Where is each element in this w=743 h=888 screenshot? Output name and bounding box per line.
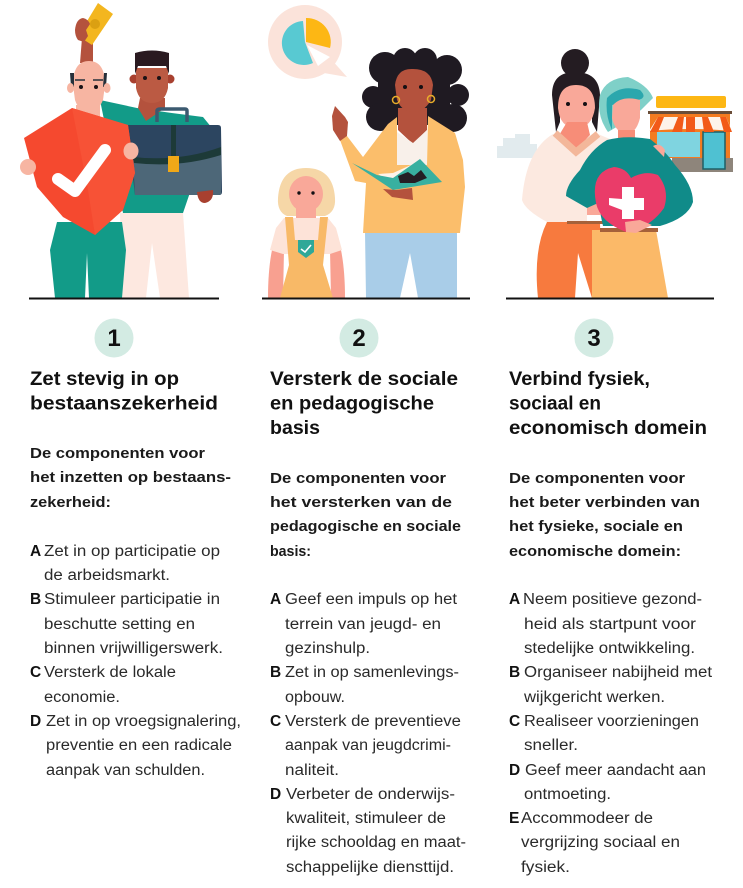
woman with hair bun	[522, 49, 625, 298]
column 3 heading: sociaal en	[509, 392, 601, 414]
number badge 1: 1	[107, 325, 121, 352]
column 3 list: Neem positieve gezond-	[523, 591, 702, 608]
column 3 intro: economische domein:	[509, 543, 681, 560]
number badge 2: 2	[352, 325, 366, 352]
column 3 list: fysiek.	[521, 859, 570, 876]
column 3 intro: het beter verbinden van	[509, 494, 700, 511]
column 1 intro: zekerheid:	[30, 494, 111, 511]
column 2 list: terrein van jeugd- en	[285, 616, 441, 633]
column 1 list: Versterk de lokale	[44, 664, 176, 681]
column 1 list: A	[30, 543, 41, 560]
column 1 list: beschutte setting en	[44, 616, 195, 633]
column 3 list: B	[509, 664, 520, 681]
open book	[352, 159, 442, 200]
column 3 list: E	[509, 810, 519, 827]
column 2 heading: Versterk de sociale	[270, 368, 458, 390]
column 2 list: C	[270, 713, 281, 730]
icon: red shield with check mark	[20, 108, 138, 235]
column 3 list: D	[509, 762, 520, 779]
column 3 list: ontmoeting.	[524, 786, 611, 803]
column 3 list: Organiseer nabijheid met	[524, 664, 713, 681]
column 3 intro	[509, 470, 700, 560]
column 3 list: Geef meer aandacht aan	[525, 762, 706, 779]
column 2 list: rijke schooldag en maat-	[286, 834, 466, 851]
column 2 intro: het versterken van de	[270, 494, 452, 511]
column 3 heading	[509, 368, 707, 439]
number badge 1	[94, 318, 134, 358]
number badge 2	[340, 318, 378, 358]
column 2 intro: De componenten voor	[270, 470, 446, 487]
column 1 list: Zet in op vroegsignalering,	[46, 713, 241, 730]
column 1 list: preventie en een radicale	[46, 737, 232, 754]
column 1 list: Zet in op participatie op	[44, 543, 220, 560]
column 1 list: aanpak van schulden.	[46, 762, 205, 779]
shop building	[648, 96, 733, 172]
column 2 list	[270, 591, 466, 876]
column 3 intro: het fysieke, sociale en	[509, 518, 683, 535]
column 1 intro: De componenten voor	[30, 445, 205, 462]
column 1 heading: Zet stevig in op	[30, 368, 179, 390]
column 1 list: economie.	[44, 689, 120, 706]
column 1 heading	[30, 368, 218, 414]
column 2 intro	[270, 470, 461, 560]
column 2 heading: basis	[270, 417, 320, 439]
column 2 list: gezinshulp.	[285, 640, 370, 657]
column 2 list: B	[270, 664, 281, 681]
column 2 intro: pedagogische en sociale	[270, 518, 461, 535]
column 2 list: kwaliteit, stimuleer de	[286, 810, 446, 827]
column 3 list: heid als startpunt voor	[524, 616, 696, 633]
illustration: woman pointing at pie chart, with girl	[268, 5, 469, 298]
column 3 list: A	[509, 591, 520, 608]
column 2 list: A	[270, 591, 281, 608]
column 3 list: Accommodeer de	[521, 810, 653, 827]
column 1 list: Stimuleer participatie in	[44, 591, 220, 608]
man with shield	[50, 38, 126, 298]
column 2 list: Verbeter de onderwijs-	[286, 786, 455, 803]
column 1 list: de arbeidsmarkt.	[44, 567, 170, 584]
column 3 list: vergrijzing sociaal en	[521, 834, 680, 851]
column 1 list: D	[30, 713, 41, 730]
column 3 list: stedelijke ontwikkeling.	[524, 640, 695, 657]
column 3 list: C	[509, 713, 520, 730]
column 3 list	[509, 591, 713, 876]
icon: banknote	[75, 3, 113, 45]
column 2 list: D	[270, 786, 281, 803]
column 1 intro: het inzetten op bestaans-	[30, 469, 231, 486]
column 1 intro	[30, 445, 231, 511]
girl in overalls	[268, 168, 345, 298]
column 3 list: Realiseer voorzieningen	[524, 713, 699, 730]
icon: briefcase	[127, 109, 222, 203]
column 3 heading: economisch domein	[509, 417, 707, 439]
column 2 list: Zet in op samenlevings-	[285, 664, 459, 681]
column 2 list: Versterk de preventieve	[285, 713, 461, 730]
column 2 heading	[270, 368, 458, 439]
column 1 list: binnen vrijwilligerswerk.	[44, 640, 223, 657]
column 2 list: schappelijke diensttijd.	[286, 859, 454, 876]
column 1 list: B	[30, 591, 41, 608]
column 2 list: Geef een impuls op het	[285, 591, 458, 608]
speech bubble with pie chart	[268, 5, 347, 79]
column 1 list	[30, 543, 241, 779]
column 2 list: aanpak van jeugdcrimi-	[285, 737, 451, 754]
column 3 intro: De componenten voor	[509, 470, 685, 487]
column 1 heading: bestaanszekerheid	[30, 392, 218, 414]
column 2 heading: en pedagogische	[270, 392, 434, 414]
number badge 3	[574, 318, 614, 358]
column 1 list: C	[30, 664, 41, 681]
illustration: two men with shield and briefcase	[20, 3, 222, 298]
man with briefcase	[100, 50, 212, 298]
column 3 heading: Verbind fysiek,	[509, 368, 650, 390]
baseline rules	[29, 298, 714, 300]
number badge 3: 3	[587, 325, 601, 352]
column 2 list: naliteit.	[285, 762, 339, 779]
column 2 list: opbouw.	[285, 689, 345, 706]
column 3 list: wijkgericht werken.	[523, 689, 665, 706]
column 2 intro: basis:	[270, 543, 311, 560]
woman with teal hair	[566, 77, 693, 298]
woman with curly hair	[332, 48, 469, 298]
column 3 list: sneller.	[524, 737, 578, 754]
icon: heart with cross	[595, 167, 666, 233]
skyline	[497, 134, 537, 158]
illustration: two women with heart and shop	[497, 49, 733, 298]
